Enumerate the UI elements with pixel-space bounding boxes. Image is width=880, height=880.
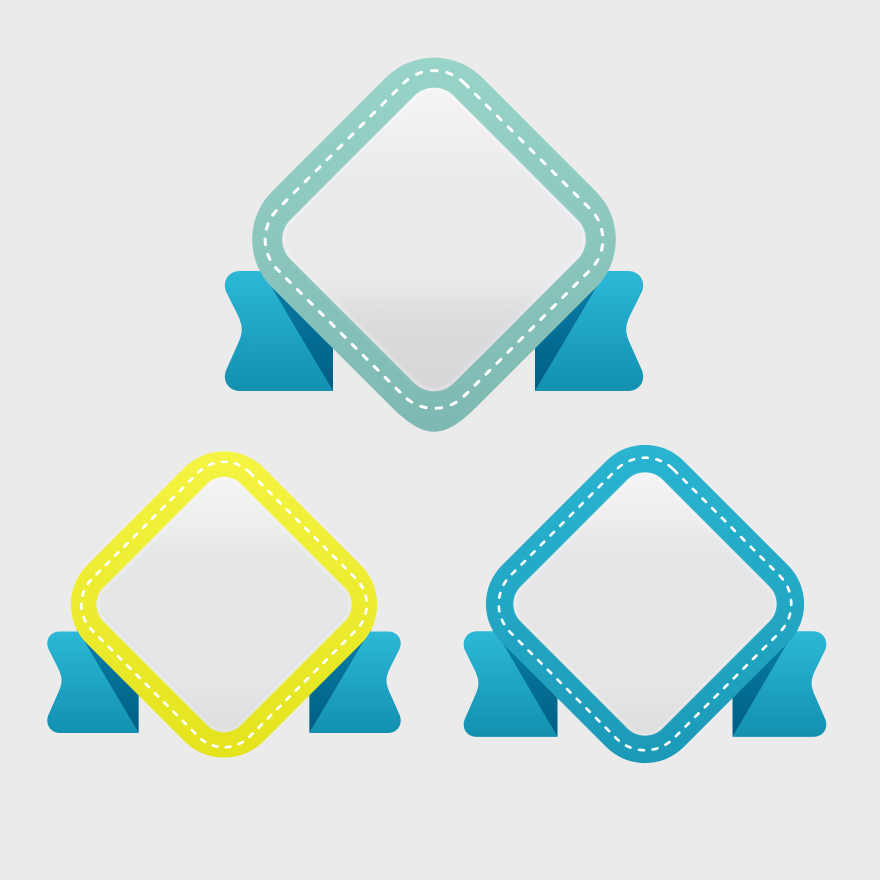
ribbon: right	[309, 629, 401, 733]
panel highlight	[273, 78, 595, 401]
badge: yellow	[47, 428, 401, 781]
panel highlight	[505, 464, 785, 744]
ribbon: left	[47, 629, 139, 733]
ribbon: left	[464, 630, 557, 737]
ribbon: right	[535, 268, 643, 391]
panel highlight	[88, 469, 360, 740]
stitching	[247, 53, 621, 426]
inner panel	[87, 467, 361, 742]
diamond frame	[463, 422, 827, 786]
inner panel	[503, 462, 787, 746]
stitching	[66, 447, 382, 762]
ribbon: right	[733, 630, 826, 737]
badge: blue	[463, 422, 827, 786]
inner panel	[271, 76, 597, 403]
stitching	[482, 441, 808, 767]
diamond frame	[224, 29, 644, 450]
badge: teal	[224, 29, 644, 450]
ribbon: left	[225, 268, 333, 391]
diamond frame	[48, 428, 400, 781]
